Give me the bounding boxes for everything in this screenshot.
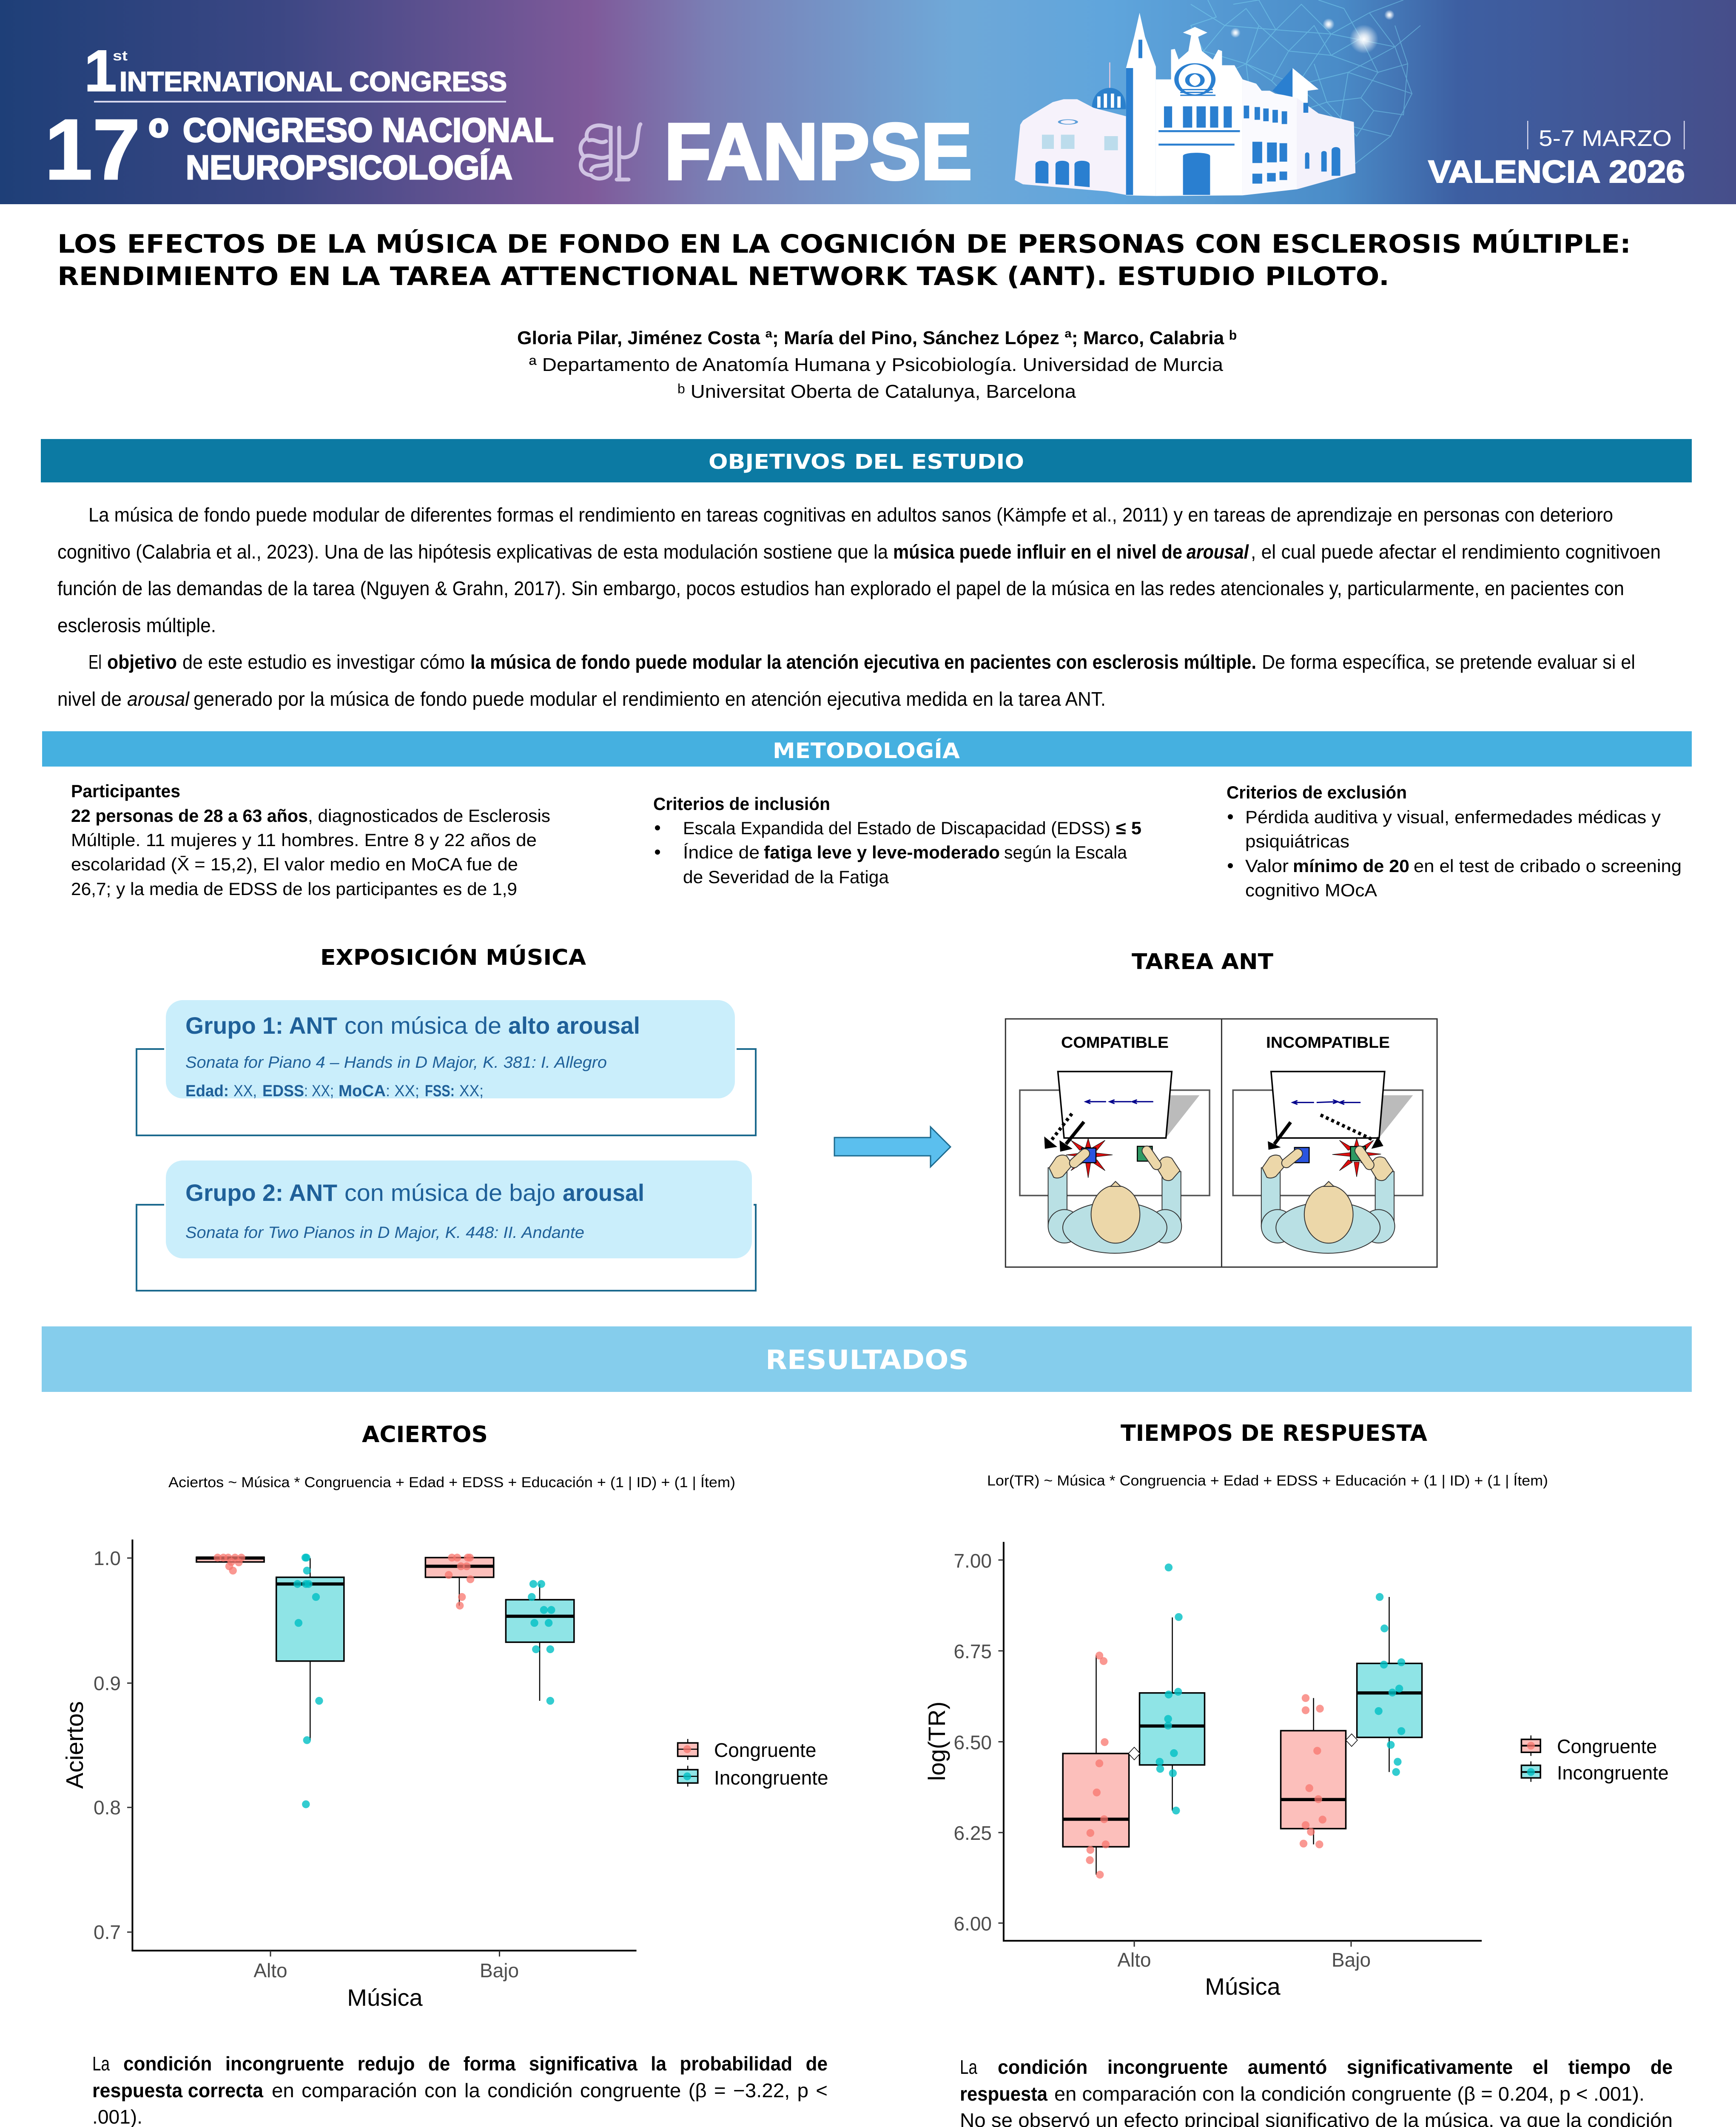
text block: participantes: Participantes: [71, 781, 180, 801]
authors and affiliations: [517, 328, 1237, 402]
text block: objetivos: arousal: [1187, 541, 1249, 563]
panel: grupo 1: FSS:: [425, 1082, 455, 1100]
box: alto congruente: [196, 1554, 264, 1574]
axis labels: 6.25: [953, 1822, 992, 1844]
axis labels: 7.00: [953, 1550, 992, 1572]
text block: criterios de exclusión: Valor: [1245, 856, 1289, 876]
heading: metodología: METODOLOGÍA: [773, 738, 960, 763]
panel: grupo 2: Grupo 2: ANT: [185, 1179, 337, 1206]
panel: grupo 1: XX,: [233, 1082, 257, 1100]
text block: objetivos: arousal: [127, 688, 190, 710]
panel: grupo 1: Edad:: [185, 1082, 229, 1100]
panel: grupo 1: con música de: [344, 1012, 501, 1039]
text block: objetivos: de este estudio es investigar cómo: [182, 651, 465, 673]
axis labels: log(TR): [923, 1702, 950, 1781]
formula: aciertos: Aciertos ~ Música * Congruencia + Edad + EDSS + Educación + (1 | ID) + (1 | Ítem): [168, 1474, 735, 1491]
text block: objetivos: , el cual puede afectar el rendimiento cognitivoen: [1251, 541, 1661, 563]
text block: objetivos: esclerosis múltiple.: [57, 614, 216, 636]
text block: criterios de inclusión: de Severidad de la Fatiga: [683, 867, 889, 887]
box: bajo congruente: [1281, 1694, 1346, 1848]
arrow: [834, 1127, 951, 1167]
panel: grupo 1: alto arousal: [508, 1012, 640, 1039]
heading: tarea ant: TAREA ANT: [1132, 949, 1273, 975]
axis labels: Aciertos: [61, 1701, 88, 1789]
text block: criterios de exclusión: en el test de cribado o screening: [1414, 856, 1682, 876]
axis labels: 0.8: [94, 1796, 121, 1819]
box: bajo incongruente: [506, 1580, 574, 1705]
text block: objetivos: la música de fondo puede modular la atención ejecutiva en pacientes con esclerosis múltiple.: [470, 651, 1256, 673]
text block: criterios de inclusión: según la Escala: [1004, 842, 1127, 862]
legend keys: [1521, 1736, 1540, 1782]
axis labels: Congruente: [714, 1739, 816, 1761]
title: [57, 229, 1631, 291]
axis labels: Alto: [1117, 1949, 1151, 1971]
text block: criterios de inclusión: Criterios de inclusión: [653, 794, 830, 814]
panel: grupo 2: con música de bajo: [344, 1179, 555, 1206]
text block: resultados aciertos: [92, 2053, 828, 2127]
panel: grupo 1: Sonata for Piano 4 – Hands in D Major, K. 381: I. Allegro: [185, 1054, 607, 1072]
text block: participantes: 22 personas de 28 a 63 años: [71, 806, 308, 826]
axis labels: 6.50: [953, 1731, 992, 1753]
text block: resultados aciertos: condición incongruente redujo de forma significativa la probabilidad de: [123, 2053, 828, 2075]
diagram: tarea ANT: [1005, 1019, 1437, 1267]
heading: aciertos: ACIERTOS: [362, 1422, 488, 1448]
text block: criterios de exclusión: Criterios de exclusión: [1227, 782, 1407, 802]
box: bajo congruente: [425, 1554, 494, 1610]
axis labels: 6.00: [953, 1913, 992, 1935]
text block: criterios de exclusión: [1227, 782, 1682, 900]
heading: resultados: [42, 1326, 1692, 1392]
text block: objetivos: El: [88, 651, 102, 673]
text block: participantes: Múltiple. 11 mujeres y 11 hombres. Entre 8 y 22 años de: [71, 830, 537, 850]
text block: resultados aciertos: en comparación con la condición congruente (β = −3.22, p <: [272, 2079, 828, 2101]
authors and affiliations: ᵇ Universitat Oberta de Catalunya, Barcelona: [677, 381, 1076, 402]
text block: criterios de inclusión: Índice de: [683, 842, 760, 862]
text block: criterios de inclusión: fatiga leve y leve-moderado: [764, 842, 1000, 862]
date and place: VALENCIA 2026: [1428, 154, 1685, 189]
text block: resultados tiempos: respuesta: [960, 2083, 1047, 2105]
axis labels: 0.9: [94, 1672, 121, 1694]
axis labels: Alto: [253, 1959, 287, 1982]
authors and affiliations: ª Departamento de Anatomía Humana y Psicobiología. Universidad de Murcia: [529, 354, 1224, 375]
heading: exposición música: EXPOSICIÓN MÚSICA: [320, 944, 586, 970]
text block: objetivos: [57, 504, 1661, 710]
panel: grupo 1: MoCA: [339, 1082, 386, 1100]
panel: grupo 1: EDSS: [262, 1082, 304, 1100]
text block: objetivos: objetivo: [107, 651, 177, 673]
text block: participantes: , diagnosticados de Esclerosis: [308, 806, 550, 826]
heading: resultados: RESULTADOS: [766, 1344, 969, 1375]
heading: metodología: [42, 731, 1692, 767]
mean diamonds: [1128, 1734, 1357, 1760]
axis labels: [61, 1547, 828, 2011]
panel: compatible scene: [1020, 1072, 1210, 1253]
title: LOS EFECTOS DE LA MÚSICA DE FONDO EN LA COGNICIÓN DE PERSONAS CON ESCLEROSIS MÚLTIPLE:: [57, 229, 1631, 259]
chart: tiempos de respuesta boxplot: [923, 1542, 1669, 2000]
panel: grupo 2: [137, 1160, 756, 1291]
legend keys: [678, 1739, 698, 1787]
congress text: national: [45, 101, 554, 197]
text block: participantes: [71, 781, 550, 899]
date and place: 5-7 MARZO: [1539, 126, 1672, 151]
text block: objetivos: función de las demandas de la tarea (Nguyen & Grahn, 2017). Sin embargo, pocos estudios han explorado el papel de la música en las redes atencionales y, particularmente, en pacientes con: [57, 577, 1624, 599]
congress text: national: 17: [45, 101, 140, 197]
congress text: national: º: [148, 107, 168, 169]
panel: grupo 1: : XX;: [386, 1082, 419, 1100]
text block: criterios de exclusión: Pérdida auditiva y visual, enfermedades médicas y: [1245, 807, 1661, 827]
heading: objetivos: OBJETIVOS DEL ESTUDIO: [709, 450, 1024, 474]
text block: objetivos: La música de fondo puede modular de diferentes formas el rendimiento en tareas cognitivas en adultos sanos (Kämpfe et al., 2011) y en tareas de aprendizaje en personas con deterioro: [88, 504, 1613, 526]
stars: [1230, 10, 1394, 54]
FANPSE wordmark: FANPSE: [664, 107, 972, 196]
icon: brain and psi logo: [581, 124, 640, 180]
text block: criterios de inclusión: [653, 794, 1141, 887]
text block: resultados tiempos: La: [960, 2056, 977, 2078]
axis labels: 1.0: [94, 1547, 121, 1569]
axis labels: Música: [1205, 1973, 1281, 2000]
text block: objetivos: música puede influir en el nivel de: [893, 541, 1182, 563]
network pattern: [1191, 0, 1420, 166]
text block: criterios de exclusión: mínimo de 20: [1293, 856, 1409, 876]
text block: participantes: escolaridad (X̄ = 15,2), El valor medio en MoCA fue de: [71, 854, 518, 874]
text block: criterios de inclusión: Escala Expandida del Estado de Discapacidad (EDSS): [683, 818, 1110, 838]
text block: resultados aciertos: respuesta correcta: [92, 2079, 263, 2101]
authors and affiliations: Gloria Pilar, Jiménez Costa ª; María del Pino, Sánchez López ª; Marco, Calabria ᵇ: [517, 328, 1237, 348]
congress text: national: NEUROPSICOLOGÍA: [186, 148, 512, 186]
axis labels: Congruente: [1557, 1736, 1657, 1757]
box: alto congruente: [1063, 1652, 1129, 1879]
axis labels: 0.7: [94, 1921, 121, 1943]
panel: grupo 1: : XX;: [304, 1082, 334, 1100]
axis labels: Bajo: [480, 1959, 519, 1982]
building illustration: [1015, 13, 1355, 196]
text block: resultados tiempos: [960, 2056, 1673, 2127]
header banner: [0, 0, 1736, 204]
formula: tiempos: Lor(TR) ~ Música * Congruencia + Edad + EDSS + Educación + (1 | ID) + (1 | Ítem): [987, 1473, 1548, 1489]
panel: grupo 2: arousal: [563, 1179, 644, 1206]
heading: objetivos: [41, 439, 1692, 482]
heading: tiempos de respuesta: TIEMPOS DE RESPUESTA: [1121, 1420, 1427, 1446]
panel: incompatible scene: [1233, 1072, 1423, 1253]
axis labels: Incongruente: [714, 1767, 828, 1789]
text block: participantes: 26,7; y la media de EDSS de los participantes es de 1,9: [71, 879, 517, 899]
label: incompatible: INCOMPATIBLE: [1266, 1034, 1390, 1051]
axis labels: Música: [347, 1984, 423, 2011]
box: bajo incongruente: [1357, 1593, 1422, 1776]
text block: objetivos: nivel de: [57, 688, 122, 710]
congress text: international: INTERNATIONAL CONGRESS: [120, 66, 507, 97]
box: alto incongruente: [1140, 1563, 1204, 1814]
text block: objetivos: cognitivo (Calabria et al., 2023). Una de las hipótesis explicativas de esta modulación sostiene que la: [57, 541, 888, 563]
congress text: international: st: [113, 48, 128, 63]
text block: criterios de exclusión: cognitivo MOcA: [1245, 880, 1377, 900]
panel: grupo 1: [137, 999, 756, 1135]
date and place: [1428, 121, 1685, 189]
axis labels: Bajo: [1332, 1949, 1371, 1971]
chart: aciertos boxplot: [61, 1540, 828, 2011]
axis labels: 6.75: [953, 1640, 992, 1662]
axis labels: Incongruente: [1557, 1762, 1669, 1784]
congress text: international: [84, 38, 507, 104]
panel: grupo 2: Sonata for Two Pianos in D Major, K. 448: II. Andante: [185, 1224, 584, 1242]
panel: grupo 1: Grupo 1: ANT: [185, 1012, 337, 1039]
text block: criterios de exclusión: psiquiátricas: [1245, 831, 1349, 851]
axis labels: [923, 1550, 1669, 2000]
text block: resultados tiempos: en comparación con la condición congruente (β = 0.204, p < .001).: [1054, 2083, 1645, 2105]
congress text: national: CONGRESO NACIONAL: [183, 111, 554, 149]
text block: criterios de inclusión: ≤ 5: [1116, 818, 1141, 838]
text block: resultados aciertos: La: [92, 2053, 110, 2075]
congress text: international: 1: [84, 38, 117, 104]
text block: objetivos: generado por la música de fondo puede modular el rendimiento en atención ejecutiva medida en la tarea ANT.: [194, 688, 1106, 710]
box: alto incongruente: [276, 1554, 344, 1808]
text block: resultados tiempos: condición incongruente aumentó significativamente el tiempo de: [998, 2056, 1673, 2078]
label: compatible: COMPATIBLE: [1061, 1034, 1169, 1051]
text block: objetivos: De forma específica, se pretende evaluar si el: [1262, 651, 1635, 673]
panel: grupo 1: XX;: [459, 1082, 484, 1100]
title: RENDIMIENTO EN LA TAREA ATTENCTIONAL NETWORK TASK (ANT). ESTUDIO PILOTO.: [57, 262, 1389, 291]
